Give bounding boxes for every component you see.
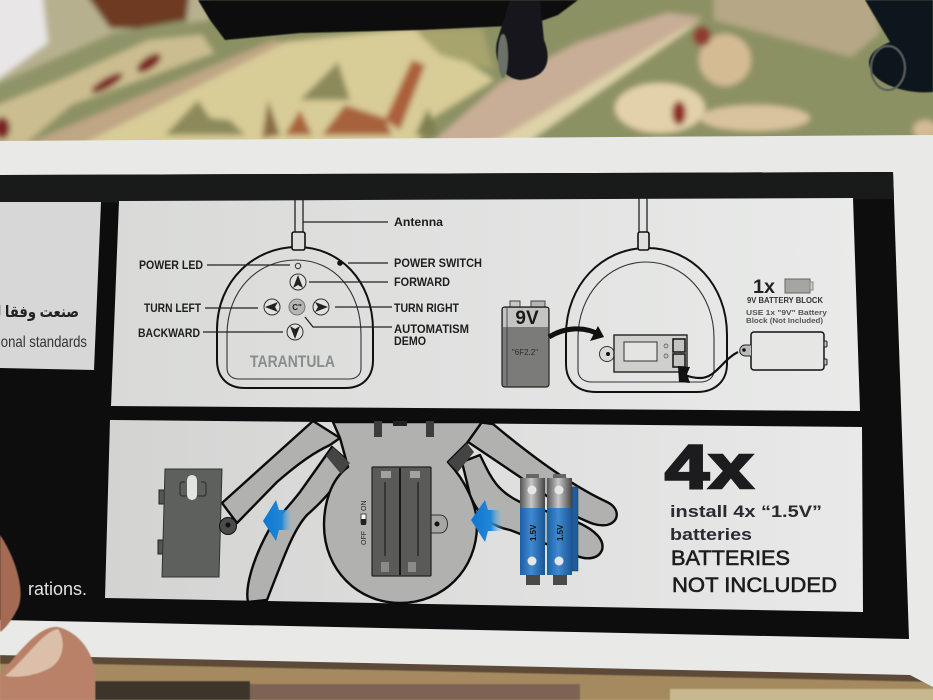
inner dome [227, 260, 361, 379]
install line: install 4x “1.5V” [670, 502, 822, 521]
on off switch: OFF [361, 531, 368, 545]
spider body [324, 422, 482, 603]
label automatism demo: AUTOMATISM [394, 324, 469, 336]
inner dome back [578, 262, 714, 382]
leg joints [326, 443, 474, 474]
panel: AA batteries [105, 420, 863, 612]
lower left leg [247, 447, 350, 602]
use note line 1: USE 1x "9V" Battery [746, 310, 827, 317]
battery instructions [665, 433, 837, 597]
battery module [600, 335, 687, 372]
label demo: DEMO [394, 336, 426, 348]
1x battery block note [746, 277, 827, 325]
antenna base back [638, 232, 649, 250]
remote front [217, 200, 373, 388]
label forward: FORWARD [394, 277, 450, 289]
battery block title: 9V BATTERY BLOCK [747, 296, 823, 305]
antenna base [292, 232, 305, 250]
outer dome [217, 247, 373, 388]
wire arrow [678, 352, 738, 383]
batteries not included line 2: NOT INCLUDED [672, 574, 837, 597]
rear battery [572, 487, 578, 571]
blue arrow left [263, 500, 294, 541]
power LED [295, 263, 301, 269]
outer dome back [566, 248, 727, 392]
1x: 1x [753, 277, 775, 298]
blue arrow right [471, 500, 504, 542]
button forward [290, 274, 306, 290]
footer text: rations. [28, 579, 87, 599]
label backward: BACKWARD [138, 328, 200, 340]
label turn right: TURN RIGHT [394, 303, 459, 315]
button right [313, 299, 329, 315]
suitcase and wheels [198, 0, 933, 92]
button backward [287, 324, 303, 340]
antenna back [639, 198, 647, 232]
on off switch [361, 500, 368, 545]
fingers [0, 535, 95, 700]
battery two: 1.5V [556, 524, 565, 541]
black instruction background [0, 172, 909, 639]
battery cover [158, 469, 236, 577]
AA batteries [520, 474, 578, 585]
right upper leg [465, 422, 617, 525]
label turn left: TURN LEFT [144, 303, 201, 315]
label power led: POWER LED [139, 260, 203, 272]
button demo [289, 299, 305, 315]
label power switch: POWER SWITCH [394, 258, 482, 270]
leader lines [203, 222, 392, 332]
button demo: C" [292, 303, 302, 312]
thumb left [0, 535, 21, 632]
external battery box [740, 332, 827, 370]
white product box [0, 135, 933, 687]
9V battery: 9V [515, 308, 539, 329]
TARANTULA logo: TARANTULA [250, 352, 335, 371]
use note line 2: Block (Not Included) [746, 318, 823, 325]
top slots [374, 421, 434, 437]
insertion arrow [549, 326, 604, 341]
9V battery: "6F2.2" [512, 348, 538, 357]
labels [138, 217, 482, 348]
battery one: 1.5V [529, 524, 538, 541]
fingernail [5, 629, 63, 677]
remote back with battery bay [502, 198, 827, 392]
batteries not included line 1: BATTERIES [671, 547, 790, 570]
panel: remote control [111, 198, 860, 411]
antenna [295, 200, 303, 232]
body illustration [222, 421, 617, 603]
finger bottom [0, 627, 95, 700]
suitcase body [198, 0, 578, 40]
button left [264, 299, 280, 315]
battery compartment [372, 467, 431, 576]
panel: left text [0, 202, 101, 370]
battery tab [431, 515, 448, 533]
power switch [337, 260, 343, 266]
wheel right [865, 0, 933, 92]
batteries line: batteries [670, 525, 752, 544]
table below box [0, 655, 933, 700]
carpet background [0, 0, 933, 160]
wheel left [496, 0, 548, 80]
upper left leg [222, 421, 340, 523]
4x heading: 4x [665, 433, 754, 502]
on off switch: ON [361, 500, 368, 511]
9V battery [502, 301, 549, 387]
label antenna: Antenna [394, 217, 444, 229]
right lower leg [462, 455, 603, 558]
battery icon [785, 279, 813, 293]
